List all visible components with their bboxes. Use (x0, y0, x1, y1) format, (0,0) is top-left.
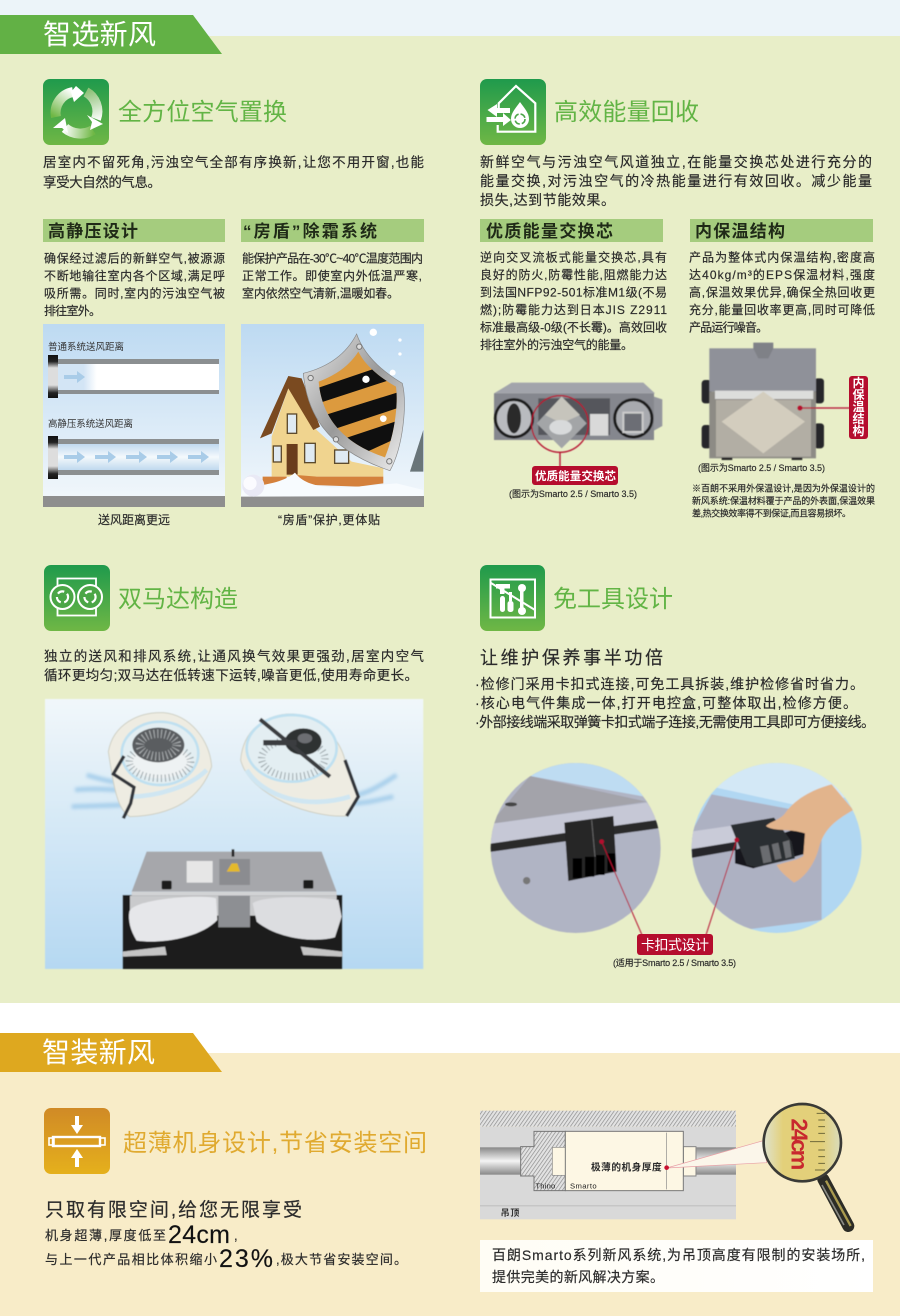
intro text: 居室内不留死角,污浊空气全部有序换新,让您不用开窗,也能 (43, 154, 424, 170)
red callout: 构 (852, 423, 865, 438)
text box (480, 1240, 873, 1292)
model note: (图示为Smarto 2.5 / Smarto 3.5) (698, 462, 825, 473)
footnote: 差,热交换效率得不到保证,而且容易损坏。 (692, 508, 851, 518)
panel: 双马达构造 (44, 565, 424, 969)
heading: 超薄机身设计,节省安装空间 (123, 1130, 427, 1157)
body text (480, 250, 667, 352)
text with 23% (45, 1245, 407, 1273)
heading: 免工具设计 (553, 586, 673, 613)
body text: 室内依然空气清新,温暖如春。 (242, 286, 399, 300)
red callout: 内 (852, 375, 865, 390)
text box: 百朗Smarto系列新风系统,为吊顶高度有限制的安装场所, (492, 1247, 865, 1263)
red callout (849, 375, 868, 439)
subheading bar (241, 219, 424, 242)
illustration: house and shield (241, 324, 424, 507)
subheading bar (43, 219, 225, 242)
panel: 超薄机身设计 (44, 1104, 873, 1292)
illustration: air duct distance (43, 324, 225, 507)
body text: 产品为整体式内保温结构,密度高 (689, 250, 875, 264)
icon: tools (480, 565, 545, 631)
body text: 排往室外的污浊空气的能量。 (480, 337, 633, 352)
sub-panel: 优质能量交换芯 (480, 219, 667, 499)
panel: 免工具设计 (475, 565, 875, 968)
model note: (图示为Smarto 2.5 / Smarto 3.5) (509, 488, 637, 499)
icon: circulating arrows (43, 79, 109, 145)
section banner: 智选新风: 智选新风 (43, 19, 156, 50)
body text: 排往室外。 (44, 303, 101, 318)
footnote: 新风系统:保温材料覆于产品的外表面,保温效果 (692, 495, 875, 506)
diagram: ceiling section (480, 1111, 767, 1219)
intro text (43, 154, 424, 190)
body text: 充分,能量回收率更高,同时可降低 (689, 302, 875, 317)
body text (242, 250, 423, 300)
text with 23%: ,极大节省安装空间。 (276, 1252, 407, 1267)
intro text: 享受大自然的气息。 (43, 174, 161, 190)
text with 24cm (45, 1221, 238, 1249)
red callout: 卡扣式设计 (637, 934, 713, 955)
subheading bar: 优质能量交换芯 (486, 221, 613, 241)
subheading: 让维护保养事半功倍 (480, 648, 663, 668)
bullet list: ·核心电气件集成一体,打开电控盒,可整体取出,检修方便。 (475, 695, 857, 711)
text with 24cm: , (234, 1228, 238, 1243)
red callout: 卡扣式设计: 卡扣式设计 (641, 937, 709, 953)
section banner: 智选新风 (0, 15, 222, 54)
subheading bar (690, 219, 873, 242)
body text: 标准最高级-0级(不长霉)。高效回收 (480, 320, 667, 334)
panel: 高效能量回收 (480, 79, 872, 208)
illustration: air duct distance: 高静压系统送风距离 (48, 418, 133, 430)
body text: 高,保温效果优异,确保全热回收更 (689, 284, 875, 300)
icon: house energy recovery (480, 79, 546, 145)
photo: closed clip (490, 760, 663, 937)
sub-panel: 高静压设计 (43, 219, 225, 527)
intro text (44, 648, 424, 683)
subheading bar: 内保温结构 (695, 221, 785, 241)
bullet list: ·检修门采用卡扣式连接,可免工具拆装,维护检修省时省力。 (475, 676, 864, 692)
body text: 不断地输往室内各个区域,满足呼 (44, 268, 225, 283)
heading: 双马达构造 (118, 586, 238, 613)
text with 24cm: 24cm (168, 1221, 230, 1249)
icon: thin body (44, 1108, 110, 1174)
intro text: 循环更均匀;双马达在低转速下运转,噪音更低,使用寿命更长。 (44, 667, 418, 683)
bullet list: ·外部接线端采取弹簧卡扣式端子连接,无需使用工具即可方便接线。 (475, 714, 875, 730)
body text: 能保护产品在-30℃~40℃温度范围内 (242, 250, 423, 266)
heading: 全方位空气置换 (118, 99, 287, 126)
intro text: 新鲜空气与污浊空气风道独立,在能量交换芯处进行充分的 (480, 154, 872, 170)
body text: 燃);防霉能力达到日本JIS Z2911 (480, 302, 667, 317)
footnote (692, 482, 875, 518)
body text: 良好的防火,防霉性能,阻燃能力达 (480, 267, 667, 282)
body text: 达40kg/m³的EPS保温材料,强度 (689, 267, 875, 282)
section banner: 智装新风 (0, 1033, 222, 1072)
panel: 全方位空气置换 (43, 79, 424, 190)
red callout (532, 466, 618, 485)
section banner: 智装新风: 智装新风 (42, 1037, 155, 1068)
body text: 到法国NFP92-501标准M1级(不易 (480, 286, 667, 300)
icon: magnifier with 24cm: 24cm (786, 1118, 812, 1170)
subheading bar: “房盾”除霜系统 (243, 221, 377, 241)
product photo: insulated structure (702, 343, 850, 460)
body text (689, 250, 875, 334)
footnote: ※百朗不采用外保温设计,是因为外保温设计的 (692, 482, 875, 494)
text with 23%: 23% (219, 1245, 273, 1273)
sub-panel: 房盾除霜系统 (241, 219, 424, 527)
photo: twin fans and unit (45, 699, 423, 969)
intro text: 独立的送风和排风系统,让通风换气效果更强劲,居室内空气 (44, 648, 424, 664)
diagram: ceiling section: 极薄的机身厚度 (591, 1161, 662, 1173)
subheading bar (480, 219, 663, 242)
intro text (480, 154, 872, 208)
red callout: 保 (852, 388, 865, 402)
heading: 高效能量回收 (554, 99, 699, 126)
red callout: 温 (852, 399, 865, 414)
text with 24cm: 机身超薄,厚度低至 (45, 1228, 166, 1243)
subheading bar: 高静压设计 (48, 221, 138, 241)
body text: 逆向交叉流板式能量交换芯,具有 (480, 250, 667, 264)
icon: twin motors (44, 565, 110, 631)
body text: 正常工作。即使室内外低温严寒, (242, 268, 422, 283)
caption: “房盾”保护,更体贴 (278, 512, 380, 527)
model note: (适用于Smarto 2.5 / Smarto 3.5) (613, 958, 736, 968)
caption: 送风距离更远 (98, 512, 170, 527)
subheading: 只取有限空间,给您无限享受 (45, 1199, 302, 1221)
diagram: ceiling section: 吊顶 (501, 1208, 519, 1218)
sub-panel: 内保温结构 (689, 219, 875, 518)
photo: hand opening clip (690, 760, 863, 937)
intro text: 能量交换,对污浊空气的冷热能量进行有效回收。减少能量 (480, 173, 872, 189)
body text (44, 250, 225, 318)
diagram: ceiling section: Smarto (570, 1182, 597, 1191)
red callout: 优质能量交换芯 (535, 469, 616, 483)
body text: 吸所需。同时,室内的污浊空气被 (44, 286, 225, 300)
icon: magnifier with 24cm (764, 1104, 851, 1226)
intro text: 损失,达到节能效果。 (480, 192, 615, 208)
red callout: 结 (852, 411, 865, 426)
body text: 确保经过滤后的新鲜空气,被源源 (44, 250, 225, 266)
product photo: exchange core (494, 383, 662, 467)
text with 23%: 与上一代产品相比体积缩小 (45, 1252, 217, 1267)
body text: 产品运行噪音。 (689, 320, 768, 334)
text box: 提供完美的新风解决方案。 (492, 1269, 664, 1285)
illustration: air duct distance: 普通系统送风距离 (48, 341, 124, 353)
bullet list (475, 676, 875, 730)
diagram: ceiling section: Thino (535, 1182, 555, 1191)
